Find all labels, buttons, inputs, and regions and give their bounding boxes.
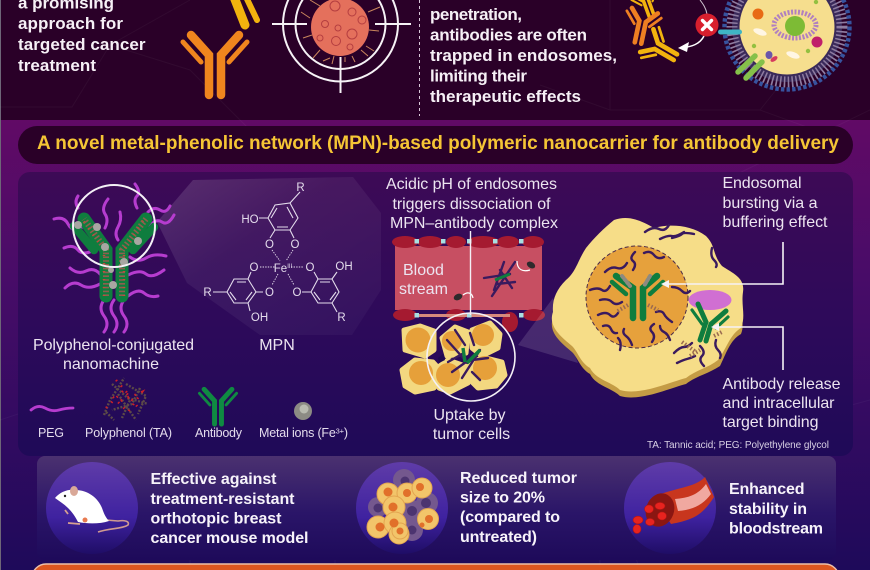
label: uptake: [433, 407, 510, 443]
MPN chemical structure: O: [291, 239, 300, 251]
MPN chemical structure: O: [265, 239, 274, 251]
main panel background: [18, 172, 853, 456]
label: acidic pH: [386, 176, 558, 232]
callout arrow: antibody release: [711, 323, 783, 370]
tumor cell cluster with uptake circle: [402, 313, 515, 401]
dashed divider: [418, 0, 420, 116]
label: nanomachine: Polyphenol-conjugated: [33, 337, 194, 354]
outcome: tumor size: Reduced tumor: [460, 470, 577, 487]
intro text: promising approach: targeted cancer: [18, 35, 146, 54]
icon: antibodies blocked from cell: [621, 0, 718, 72]
outcome: stability: bloodstream: [729, 520, 823, 538]
magnifier fan: MPN: [157, 177, 381, 335]
label: acidic pH: Acidic pH of endosomes: [386, 176, 557, 193]
legend item: PEG: [31, 406, 73, 440]
intro text: endosome trapping: limiting their: [430, 66, 527, 86]
intro text: endosome trapping: therapeutic effects: [430, 87, 581, 106]
outcome: stability: [624, 462, 823, 554]
intro text: endosome trapping: trapped in endosomes,: [430, 46, 617, 65]
label: nanomachine: [33, 337, 194, 373]
MPN chemical structure: O: [306, 262, 315, 274]
MPN chemical structure: R: [337, 312, 346, 324]
intro text: promising approach: treatment: [18, 56, 96, 75]
legend: [31, 378, 348, 440]
MPN chemical structure: Fe: [274, 263, 287, 275]
intro text: promising approach: approach for: [18, 14, 123, 33]
intro text: endosome trapping: antibodies are often: [430, 26, 587, 44]
MPN chemical structure: III: [287, 264, 293, 270]
polyphenol-conjugated nanomachine illustration: [54, 184, 174, 332]
label: endosomal bursting: bursting via a: [722, 195, 818, 212]
title bar: A novel metal-phenolic network (MPN)-based polymeric nanocarrier for antibody delivery: [37, 133, 839, 154]
label: uptake: tumor cells: [433, 426, 510, 443]
legend item: polyphenol: [85, 378, 172, 440]
legend item: metal ions: 3+: [336, 426, 345, 436]
MPN chemical structure: O: [250, 262, 259, 274]
released antibody: [692, 304, 728, 341]
intro text: endosome trapping: [430, 5, 617, 106]
outcome: mouse model: cancer mouse model: [150, 530, 308, 547]
legend item: metal ions: [259, 402, 348, 440]
callout line: dissociation: [470, 231, 472, 315]
icon: tumor cell in crosshair target: [272, 0, 411, 93]
legend item: polyphenol: Polyphenol (TA): [85, 426, 172, 440]
intro text: promising approach: [18, 0, 146, 75]
endosome: [586, 246, 690, 350]
footnote: TA: Tannic acid; PEG: Polyethylene glycol: [647, 440, 829, 451]
bottom orange bar: [32, 564, 839, 570]
outcome: stability: stability in: [729, 501, 807, 518]
label: acidic pH: MPN–antibody complex: [390, 215, 558, 232]
outcome: stability: Enhanced: [729, 481, 804, 498]
nanoparticle in vessel: [453, 260, 536, 302]
label: nanomachine: nanomachine: [63, 356, 159, 373]
background top band: [0, 0, 870, 120]
legend item: metal ions: ): [344, 426, 348, 440]
label: endosomal bursting: [722, 175, 828, 231]
surface peg fragments: [645, 225, 717, 267]
legend item: metal ions: Metal ions (Fe: [259, 426, 336, 440]
blood vessel: [392, 236, 545, 332]
icon: orange antibody binding yellow fragment: [183, 0, 257, 95]
icon: cell with lipid membrane: [718, 0, 850, 90]
MPN chemical structure: R: [203, 287, 212, 299]
MPN chemical structure: R: [296, 182, 305, 194]
legend item: antibody: Antibody: [195, 426, 243, 440]
title bar: [18, 126, 853, 164]
MPN chemical structure: HO: [241, 214, 259, 226]
large tumor cell: [552, 218, 743, 397]
label: endosomal bursting: Endosomal: [722, 175, 802, 192]
outcome: tumor size: (compared to: [460, 509, 560, 526]
outcome: mouse model: orthotopic breast: [150, 510, 282, 528]
blood vessel: Blood: [403, 262, 444, 279]
icon: tumor cells: [367, 469, 438, 544]
label: antibody release: Antibody release: [722, 376, 841, 393]
outcome: tumor size: [356, 462, 577, 554]
magnifier fan: cell: [518, 298, 578, 363]
label: antibody release: and intracellular: [722, 395, 835, 412]
target protein: [688, 290, 732, 310]
icon: blood vessel: [633, 477, 714, 534]
icon: mouse: [55, 486, 128, 532]
MPN chemical structure: O: [293, 287, 302, 299]
legend item: PEG: PEG: [38, 426, 64, 440]
panel: outcomes: [37, 456, 836, 560]
callout arrow: endosomal bursting: [661, 242, 783, 288]
intro text: endosome trapping: penetration,: [430, 5, 522, 24]
MPN chemical structure: OH: [251, 312, 268, 324]
background lower gradient: [0, 120, 870, 570]
left edge line: [0, 0, 1, 570]
outcome: tumor size: size to 20%: [460, 490, 545, 506]
MPN chemical structure: [203, 182, 353, 324]
label: acidic pH: triggers dissociation of: [392, 196, 551, 213]
label: antibody release: target binding: [722, 414, 818, 431]
released polyphenol fragments: [674, 332, 722, 366]
outcome: mouse model: Effective against: [150, 471, 277, 488]
outcome: mouse model: treatment-resistant: [150, 491, 295, 508]
label: endosomal bursting: buffering effect: [722, 214, 828, 231]
label: MPN: MPN: [259, 337, 295, 354]
MPN chemical structure: OH: [335, 261, 353, 273]
legend item: antibody: [195, 389, 243, 440]
label: antibody release: [722, 376, 841, 431]
blood vessel: stream: [399, 281, 448, 298]
MPN chemical structure: O: [265, 287, 274, 299]
outcome: tumor size: untreated): [460, 529, 537, 546]
outcome: mouse model: [46, 462, 308, 554]
label: uptake: Uptake by: [433, 407, 506, 424]
